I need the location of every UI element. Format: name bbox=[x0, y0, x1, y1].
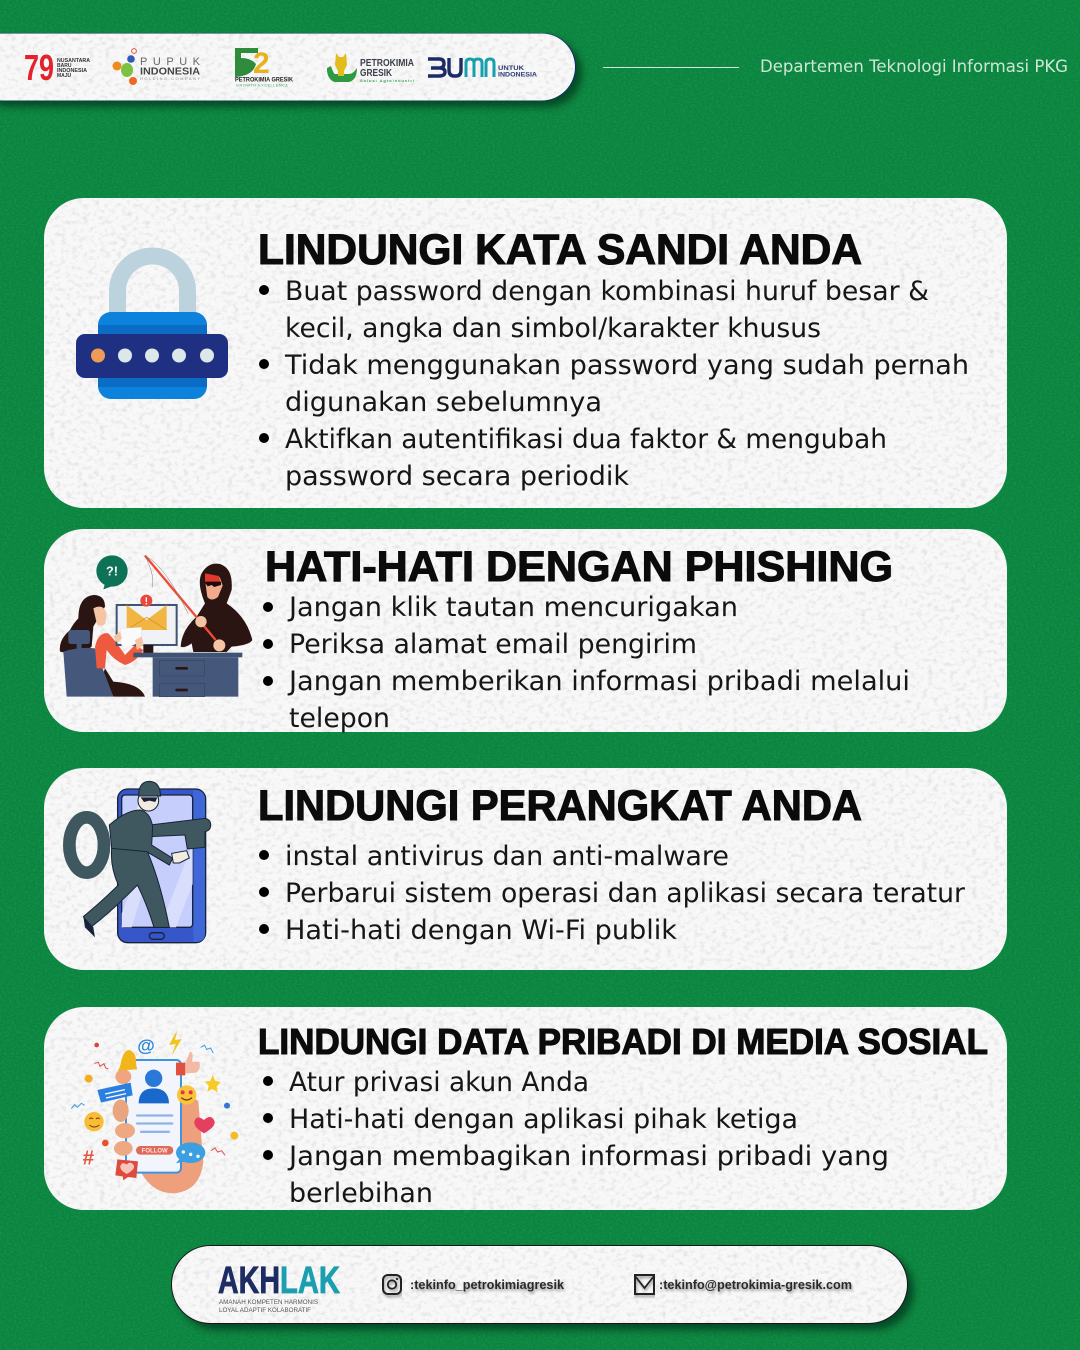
logo: Petrokimia Gresik 52: GROWTH EXCELLENCE bbox=[236, 84, 288, 88]
panel: hati-hati phishing bbox=[44, 529, 1007, 734]
bullet list: instal antivirus dan anti-malware bbox=[285, 841, 729, 872]
bullet list: Hati-hati dengan aplikasi pihak ketiga bbox=[289, 1104, 798, 1135]
logo: 79 Nusantara Baru: INDONESIA bbox=[57, 68, 87, 74]
logo: BUMN untuk Indonesia bbox=[428, 58, 537, 78]
bullet list: Aktifkan autentifikasi dua faktor & mengubah bbox=[285, 424, 887, 455]
bullet list: password secara periodik bbox=[285, 461, 629, 492]
logo: Petrokimia Gresik bbox=[327, 53, 414, 83]
instagram handle: :tekinfo_petrokimiagresik bbox=[410, 1277, 565, 1292]
logo: 79 Nusantara Baru: NUSANTARA bbox=[57, 58, 90, 64]
bullet list: Jangan memberikan informasi pribadi melalui bbox=[287, 666, 910, 697]
icon: social media hand and phone bbox=[71, 1030, 238, 1193]
logo: Pupuk Indonesia: PUPUK bbox=[140, 56, 201, 68]
logo: Petrokimia Gresik: GRESIK bbox=[360, 68, 393, 79]
heading: LINDUNGI PERANGKAT ANDA bbox=[258, 783, 862, 830]
email address: :tekinfo@petrokimia-gresik.com bbox=[659, 1277, 852, 1292]
bullet list: Buat password dengan kombinasi huruf besar & bbox=[285, 276, 929, 307]
logo: 79 Nusantara Baru bbox=[24, 47, 90, 88]
bullet list: berlebihan bbox=[289, 1178, 433, 1209]
logo: BUMN untuk Indonesia: INDONESIA bbox=[498, 72, 537, 78]
bullet list: Atur privasi akun Anda bbox=[289, 1067, 589, 1098]
logo: Petrokimia Gresik 52: PETROKIMIA GRESIK bbox=[235, 78, 294, 84]
bullet list: Periksa alamat email pengirim bbox=[289, 629, 697, 660]
logo: Petrokimia Gresik: Solusi Agroindustri bbox=[360, 78, 414, 83]
icon: instagram bbox=[383, 1275, 401, 1294]
logo: AKHLAK: AKH bbox=[218, 1260, 280, 1302]
logo: BUMN untuk Indonesia: UNTUK bbox=[498, 65, 524, 72]
panel: lindungi kata sandi bbox=[44, 198, 1007, 508]
logo: Pupuk Indonesia: HOLDING COMPANY bbox=[140, 76, 200, 81]
logo: AKHLAK: LOYAL ADAPTIF KOLABORATIF bbox=[219, 1307, 311, 1314]
bullet list: kecil, angka dan simbol/karakter khusus bbox=[285, 313, 821, 344]
icon: social media hand and phone: FOLLOW bbox=[142, 1148, 168, 1154]
heading: HATI-HATI DENGAN PHISHING bbox=[265, 544, 893, 591]
logo: AKHLAK: LAK bbox=[280, 1260, 340, 1302]
logo: Petrokimia Gresik 52: 2 bbox=[253, 47, 270, 80]
bullet list: digunakan sebelumnya bbox=[285, 387, 602, 418]
bullet list: Hati-hati dengan Wi-Fi publik bbox=[285, 915, 677, 946]
icon: social media hand and phone: # bbox=[83, 1147, 95, 1170]
bullet list: Jangan klik tautan mencurigakan bbox=[287, 592, 738, 623]
icon: phishing scene bbox=[60, 555, 252, 697]
department label: Departemen Teknologi Informasi PKG bbox=[760, 57, 1068, 77]
bullet list bbox=[263, 1067, 889, 1209]
logo: 79 Nusantara Baru: 79 bbox=[24, 47, 54, 88]
icon: phishing scene: ?! bbox=[106, 565, 118, 579]
logo: Pupuk Indonesia: INDONESIA bbox=[140, 66, 200, 78]
bullet list bbox=[259, 841, 966, 946]
bullet list bbox=[263, 592, 910, 734]
logo: 79 Nusantara Baru: BARU bbox=[57, 63, 72, 69]
logo: AKHLAK: AMANAH KOMPETEN HARMONIS bbox=[219, 1299, 319, 1306]
logo: Petrokimia Gresik: PETROKIMIA bbox=[360, 58, 414, 69]
logo: Pupuk Indonesia bbox=[112, 49, 201, 85]
icon: padlock bbox=[76, 256, 228, 399]
logo: Petrokimia Gresik 52 bbox=[235, 47, 294, 88]
icon: social media hand and phone: @ bbox=[137, 1036, 155, 1056]
divider line bbox=[603, 67, 739, 68]
bullet list bbox=[259, 276, 969, 492]
logo: 79 Nusantara Baru: MAJU bbox=[57, 73, 72, 79]
panel: lindungi perangkat bbox=[44, 768, 1007, 970]
header logo bar bbox=[0, 33, 576, 101]
heading: LINDUNGI DATA PRIBADI DI MEDIA SOSIAL bbox=[258, 1021, 988, 1062]
icon: thief with key and phone bbox=[69, 781, 211, 943]
bullet list: telepon bbox=[289, 703, 390, 734]
bullet list: Jangan membagikan informasi pribadi yang bbox=[287, 1141, 889, 1172]
bullet list: Tidak menggunakan password yang sudah pernah bbox=[284, 350, 969, 381]
panel: lindungi data pribadi bbox=[44, 1007, 1007, 1210]
logo: AKHLAK bbox=[218, 1260, 340, 1314]
bullet list: Perbarui sistem operasi dan aplikasi secara teratur bbox=[285, 878, 966, 909]
footer contact bar bbox=[171, 1245, 908, 1324]
heading: LINDUNGI KATA SANDI ANDA bbox=[258, 227, 862, 274]
icon: mail bbox=[635, 1275, 654, 1294]
